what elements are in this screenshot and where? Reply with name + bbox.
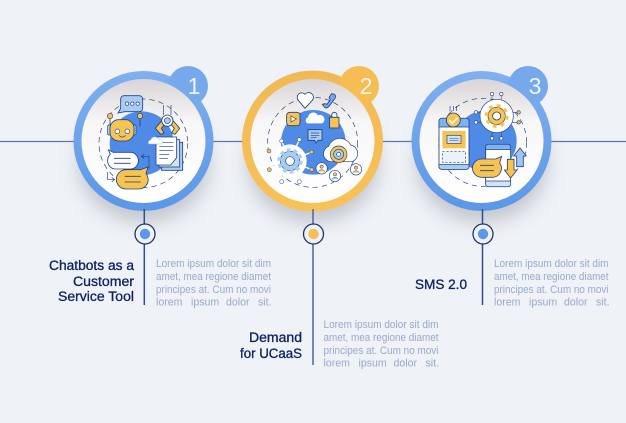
shadow xyxy=(78,103,210,223)
text block: step 1: principes at. Cum no movi xyxy=(156,284,271,296)
icon: gear with nodes xyxy=(474,92,520,140)
panel: step 2 circle xyxy=(242,66,383,223)
heading: step 1 xyxy=(49,258,135,304)
horizontal timeline line xyxy=(0,140,626,142)
text block: step 2 xyxy=(324,319,439,370)
icons: people xyxy=(316,163,362,182)
icon: heart xyxy=(297,93,313,108)
heading: step 2: for UCaaS xyxy=(240,346,302,361)
heading: step 1: Service Tool xyxy=(58,289,134,304)
icon: robot head xyxy=(107,113,143,141)
icon: robot arm xyxy=(155,105,180,134)
icon: SMS phones and gear xyxy=(439,92,527,187)
text block: step 2: amet, mea regione diamet xyxy=(324,332,439,344)
icon: right phone xyxy=(486,144,511,187)
text block: step 1: dolor xyxy=(226,296,250,308)
heading: step 1: Customer xyxy=(73,274,135,289)
icon: lock xyxy=(330,112,339,128)
text block: step 2: ipsum xyxy=(358,358,387,370)
panel: step 3 circle xyxy=(412,66,552,223)
text block: step 2: Lorem ipsum dolor sit dim xyxy=(324,319,439,331)
text block: step 3: Lorem ipsum dolor sit dim xyxy=(494,258,609,270)
text block: step 2: principes at. Cum no movi xyxy=(324,345,438,357)
icon: cloud with gear xyxy=(324,138,358,163)
stem and node: step 3 xyxy=(473,209,493,305)
text block: step 1 xyxy=(156,258,272,308)
panel: step 1 circle xyxy=(74,66,214,223)
text block: step 1: sit. xyxy=(258,296,272,308)
icon: white bubble xyxy=(108,150,138,169)
icon: dots bubble xyxy=(118,96,143,113)
outer ring xyxy=(412,71,552,211)
heading: step 3: SMS 2.0 xyxy=(415,277,467,292)
number badge 2: 2 xyxy=(360,73,372,99)
icon: left phone xyxy=(439,106,469,169)
number badge 3: 3 xyxy=(529,73,541,99)
icon: yellow message bubble xyxy=(472,156,502,177)
text block: step 1: Lorem ipsum dolor sit dim xyxy=(156,258,271,270)
text block: step 2: dolor xyxy=(394,358,418,370)
icon: yellow bubble xyxy=(116,167,148,189)
text block: step 3: sit. xyxy=(596,296,610,308)
text block: step 3: lorem xyxy=(494,296,521,308)
heading: step 1: Chatbots as a xyxy=(49,258,135,273)
icon: up arrow xyxy=(514,148,526,167)
stem and node: step 1 xyxy=(135,209,155,305)
number badge 2 xyxy=(339,66,379,106)
shadow xyxy=(416,103,548,223)
inner disc xyxy=(420,79,544,203)
text block: step 3: amet, mea regione diamet xyxy=(494,271,609,283)
icon: cloud xyxy=(148,137,163,144)
icon: documents xyxy=(156,137,183,170)
text block: step 1: lorem xyxy=(156,296,183,308)
icon: digital communications xyxy=(267,93,362,187)
icon: cloud xyxy=(306,113,324,123)
number badge 3 xyxy=(508,66,548,106)
text block: step 1: amet, mea regione diamet xyxy=(156,271,271,283)
heading: step 2: Demand xyxy=(249,330,302,345)
icon: chatbot and documents xyxy=(99,96,188,189)
number badge 1 xyxy=(168,66,208,106)
icon: large gear network xyxy=(267,138,314,184)
inner disc xyxy=(82,79,206,203)
shadow xyxy=(247,103,379,223)
stem and node: step 2 xyxy=(304,209,324,365)
text block: step 3 xyxy=(494,258,610,308)
text block: step 3: ipsum xyxy=(529,296,557,308)
icon: phone xyxy=(322,94,336,108)
heading: step 2 xyxy=(240,330,302,361)
text block: step 2: sit. xyxy=(426,358,439,370)
outer ring xyxy=(242,70,383,212)
icon: video xyxy=(287,112,300,126)
number badge 1: 1 xyxy=(188,73,200,99)
text block: step 1: ipsum xyxy=(191,296,219,308)
text block: step 3: principes at. Cum no movi xyxy=(494,284,608,296)
arrows between bubbles xyxy=(108,154,149,182)
icon: down arrow xyxy=(504,159,517,178)
text block: step 3: dolor xyxy=(564,296,588,308)
outer ring xyxy=(74,71,214,211)
text block: step 2: lorem xyxy=(324,358,350,370)
icon: chat xyxy=(308,130,322,143)
inner disc xyxy=(250,79,374,203)
